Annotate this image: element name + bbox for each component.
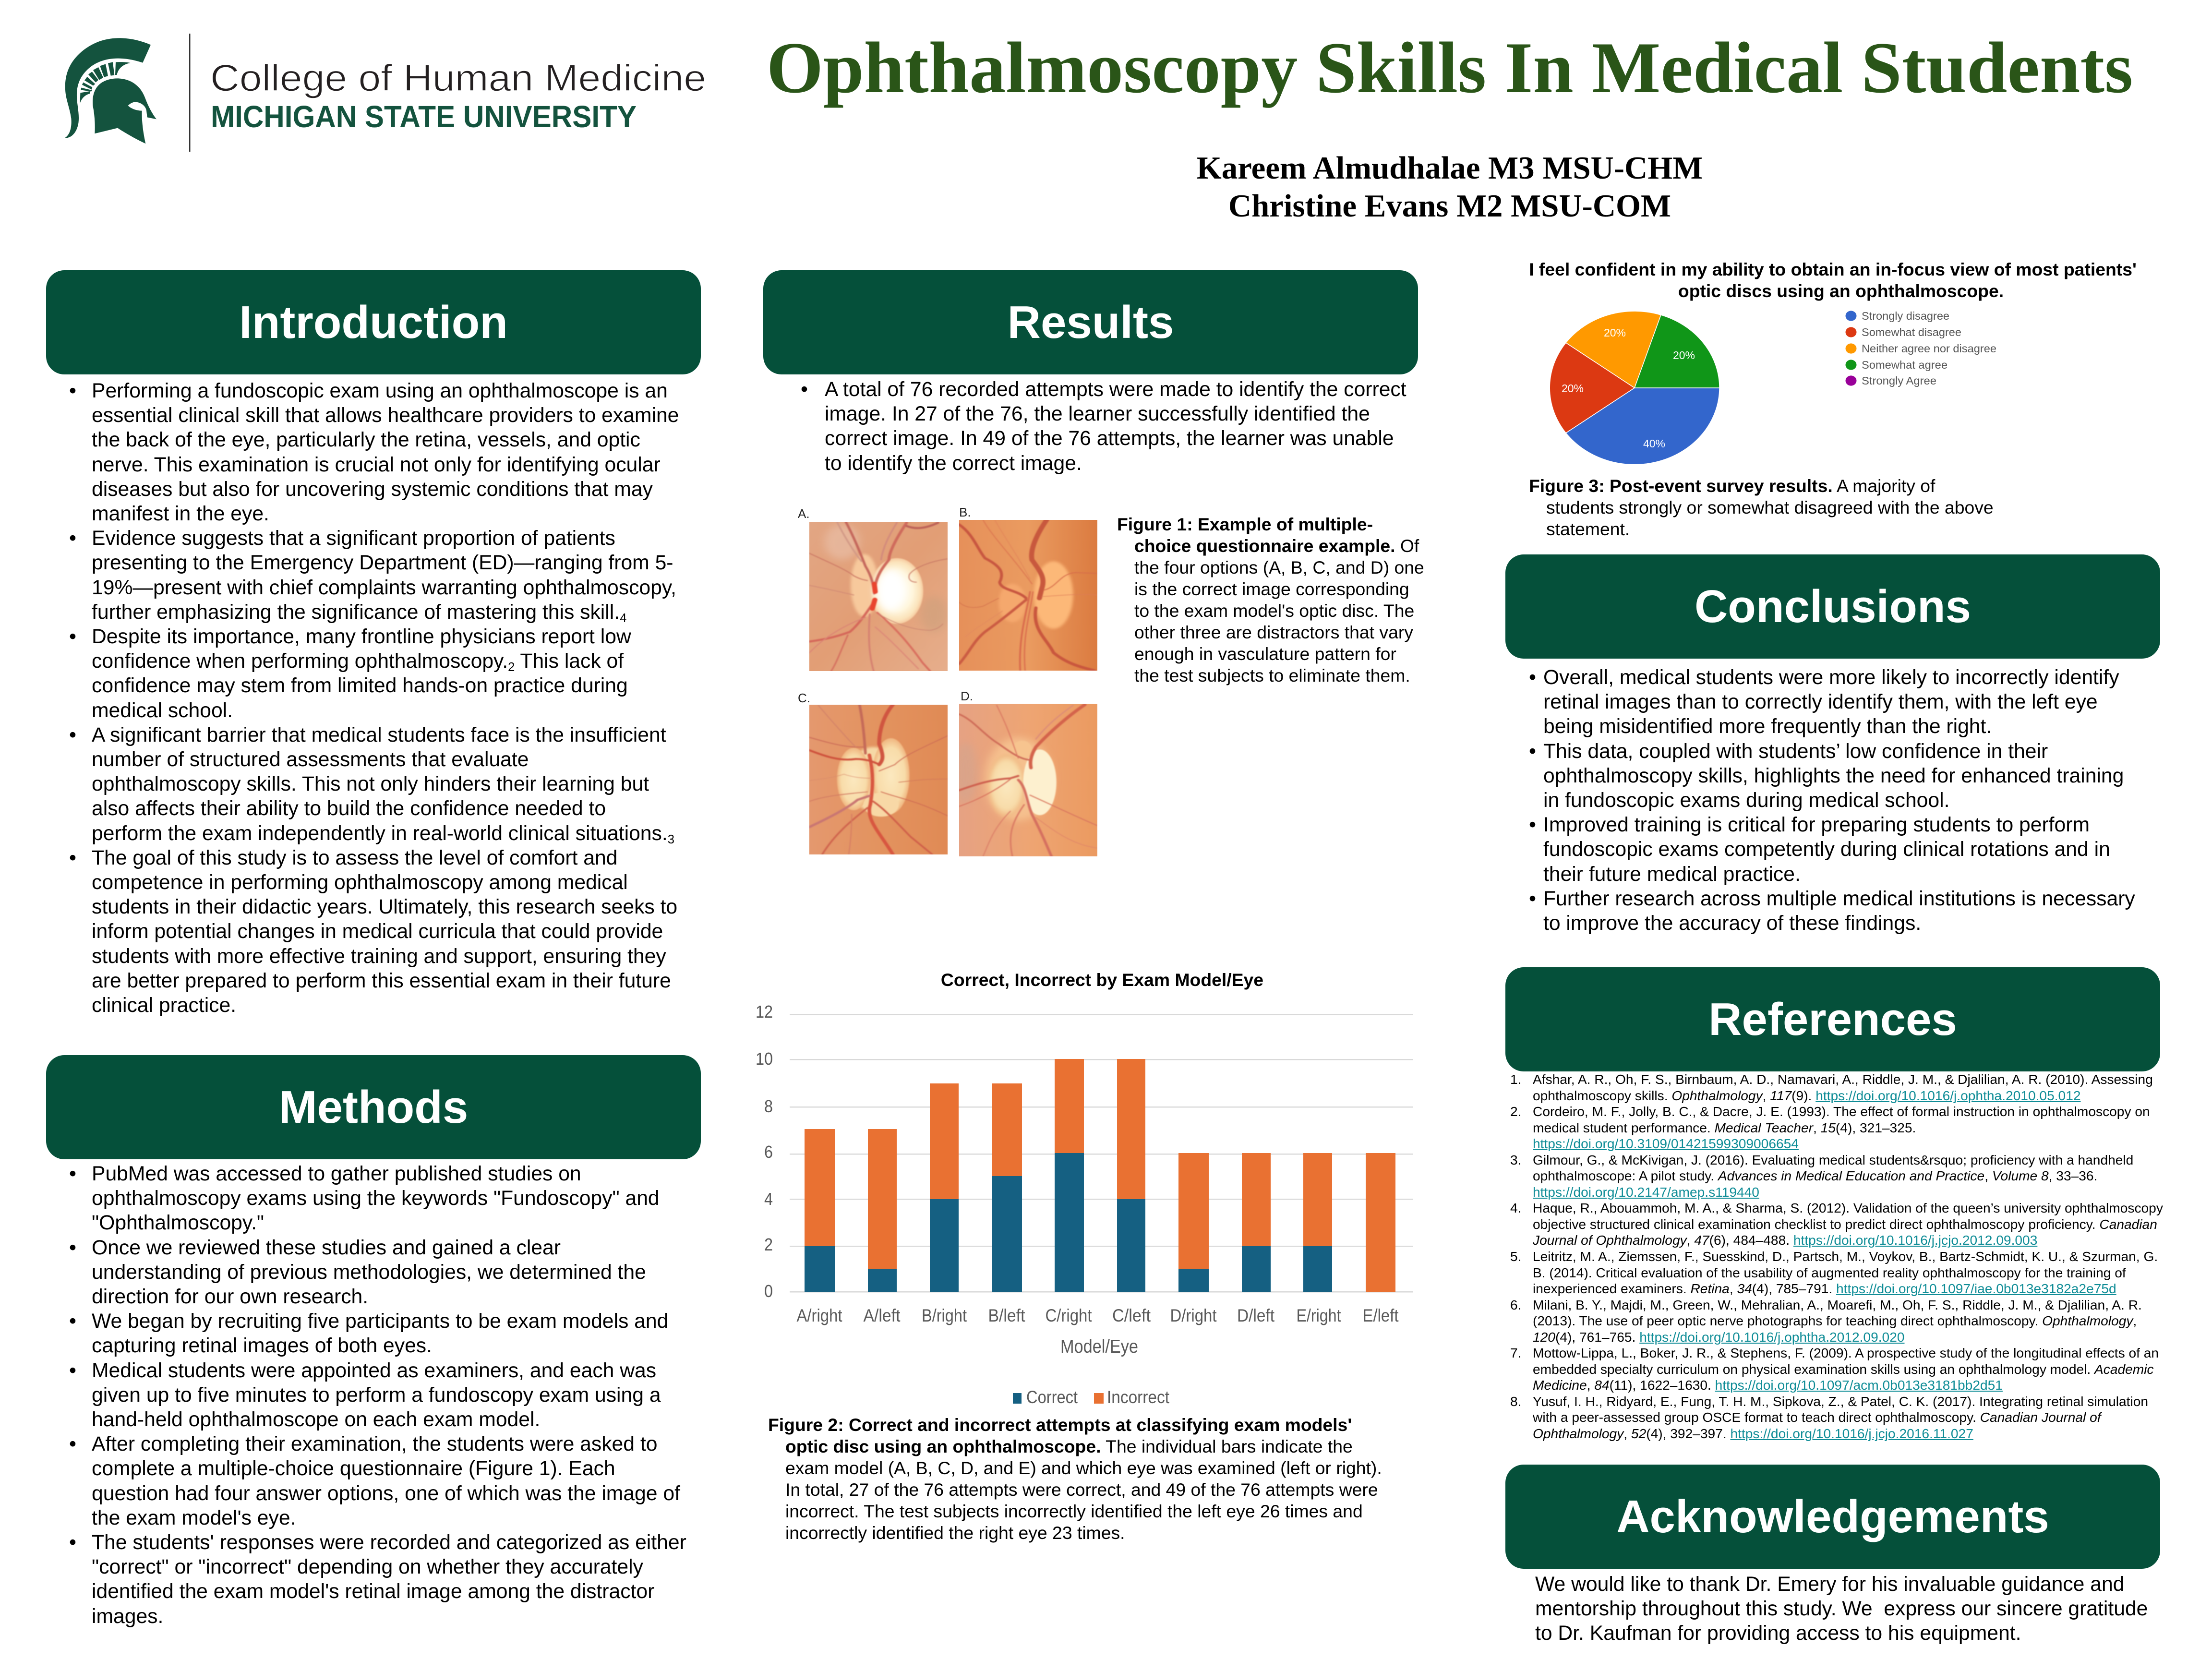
figure 1 caption: the test subjects to eliminate them.	[1134, 665, 1410, 685]
panel: reference list: Afshar, A. R., Oh, F. S., Birnbaum, A. D., Namavari, A., Riddle, J. M., & Djalilian, A. R. (2010). Assessing	[1533, 1072, 2153, 1087]
panel: introduction text: competence in performing ophthalmoscopy among medical	[92, 871, 628, 894]
x axis labels: B/left	[988, 1306, 1025, 1325]
legend: Incorrect	[1107, 1387, 1170, 1407]
image D	[954, 704, 1097, 856]
panel: reference list: Journal of Ophthalmology, 47(6), 484–488. https://doi.org/10.1016/j.jcjo.2012.09.003	[1533, 1233, 2037, 1248]
figure 2 caption	[768, 1415, 1382, 1543]
panel: methods text: "Ophthalmoscopy."	[92, 1211, 264, 1234]
heading: Conclusions: Conclusions	[1695, 581, 1971, 632]
x axis labels: A/left	[863, 1306, 901, 1325]
panel: introduction text: presenting to the Emergency Department (ED)—ranging from 5-	[92, 551, 673, 574]
panel: methods text: "correct" or "incorrect" depending on whether they accurately	[92, 1555, 643, 1578]
legend: Correct	[1026, 1387, 1078, 1407]
panel: reference list: inexperienced examiners. Retina, 34(4), 785–791. https://doi.org/10.1097/iae.0b013e3182a2e75d	[1533, 1281, 2116, 1296]
figure 1 caption: the four options (A, B, C, and D) one	[1134, 557, 1424, 577]
panel: reference list: ophthalmoscopy skills. Ophthalmology, 117(9). https://doi.org/10.1016/j.ophtha.2010.05.012	[1533, 1088, 2081, 1103]
figure 1 caption: to the exam model's optic disc. The	[1134, 601, 1414, 621]
panel: methods text: images.	[92, 1605, 163, 1628]
panel: introduction text: also affects their ability to build the confidence needed to	[92, 797, 606, 820]
y axis labels: 6	[764, 1142, 773, 1162]
y axis labels	[756, 1002, 773, 1301]
pie legend: Somewhat disagree	[1862, 326, 1961, 338]
panel: introduction text: students with more effective training and support, ensuring they	[92, 945, 666, 968]
heading: Results: Results	[1008, 297, 1174, 348]
y axis labels: 2	[764, 1235, 773, 1254]
panel: methods text: hand-held ophthalmoscope on each exam model.	[92, 1408, 540, 1431]
heading: Introduction	[46, 270, 701, 374]
heading: Conclusions	[1505, 554, 2160, 659]
image labels: A.	[798, 506, 810, 521]
panel: reference list: ophthalmoscope: A pilot study. Advances in Medical Education and Practice, Volume 8, 33–36.	[1533, 1168, 2097, 1183]
college name: College of Human Medicine	[210, 57, 706, 99]
text: 7.	[1510, 1346, 1521, 1360]
figure 1 caption: Figure 1: Example of multiple-	[1117, 514, 1373, 534]
panel: introduction text: manifest in the eye.	[92, 502, 269, 525]
panel: results text: A total of 76 recorded attempts were made to identify the correct	[825, 378, 1407, 401]
panel: reference list: with a peer-assessed group OSCE format to teach direct ophthalmoscopy. Canadian Journal of	[1533, 1410, 2101, 1425]
pie legend: Somewhat agree	[1862, 359, 1948, 371]
x axis title: Model/Eye	[1060, 1336, 1138, 1357]
text: 3.	[1510, 1153, 1521, 1167]
panel: introduction text: students in their didactic years. Ultimately, this research seeks to	[92, 895, 677, 918]
panel: reference list	[1533, 1071, 2163, 1442]
y axis labels: 4	[764, 1189, 773, 1209]
pie chart heading	[1529, 259, 2137, 301]
pie labels: 20%	[1562, 382, 1584, 395]
panel: reference list: objective structured clinical examination checklist to predict direct ophthalmoscopy proficiency. Canadian	[1533, 1217, 2157, 1232]
text: 5.	[1510, 1249, 1521, 1264]
image labels: D.	[961, 689, 973, 703]
panel: methods text: identified the exam model's retinal image among the distractor	[92, 1580, 654, 1603]
panel: reference list: B. (2014). Critical evaluation of the usability of augmented reality ophthalmoscopy for the training of	[1533, 1265, 2126, 1280]
icon: spartan helmet	[65, 38, 156, 144]
panel: introduction text: perform the exam independently in real-world clinical situations.3	[92, 822, 674, 846]
title: Ophthalmoscopy Skills In Medical Students	[767, 27, 2133, 108]
pie legend: Neither agree nor disagree	[1862, 342, 1996, 355]
university name: MICHIGAN STATE UNIVERSITY	[211, 99, 637, 134]
pie chart: survey results	[1550, 310, 1996, 464]
panel: reference list: (2013). The use of peer optic nerve photographs for teaching direct ophthalmoscopy. Ophthalmology,	[1533, 1313, 2137, 1328]
panel: conclusions text: fundoscopic exams competently during clinical rotations and in	[1543, 838, 2110, 861]
panel: methods text: We began by recruiting five participants to be exam models and	[92, 1310, 668, 1333]
panel: acknowledgements text: to Dr. Kaufman for providing access to his equipment.	[1535, 1622, 2021, 1645]
x axis labels: B/right	[922, 1306, 967, 1325]
panel: introduction text: Despite its importance, many frontline physicians report low	[92, 625, 631, 648]
panel: reference list: Gilmour, G., & McKivigan, J. (2016). Evaluating medical students&rsquo; proficiency with a handheld	[1533, 1153, 2133, 1167]
authors: Kareem Almudhalae M3 MSU-CHM	[1197, 150, 1703, 186]
panel: reference list: Medicine, 84(11), 1622–1630. https://doi.org/10.1097/acm.0b013e3181bb2d51	[1533, 1378, 2003, 1393]
pie labels: 40%	[1643, 437, 1665, 450]
panel: methods text	[70, 1162, 686, 1628]
x axis labels: E/right	[1296, 1306, 1341, 1325]
figure 2 caption: optic disc using an ophthalmoscope. The individual bars indicate the	[785, 1436, 1353, 1456]
panel: methods text: PubMed was accessed to gather published studies on	[92, 1162, 581, 1185]
panel: introduction text: diseases but also for uncovering systemic conditions that may	[92, 478, 653, 501]
panel: reference list: 120(4), 761–765. https://doi.org/10.1016/j.ophtha.2012.09.020	[1533, 1330, 1905, 1345]
pie legend: Strongly disagree	[1862, 310, 1949, 322]
panel: acknowledgements text: We would like to thank Dr. Emery for his invaluable guidance and	[1535, 1573, 2124, 1596]
x axis labels: D/left	[1237, 1306, 1275, 1325]
panel: methods text: understanding of previous methodologies, we determined the	[92, 1261, 646, 1284]
pie chart heading: optic discs using an ophthalmoscope.	[1678, 281, 2004, 301]
heading: References	[1505, 967, 2160, 1071]
panel: acknowledgements text	[1535, 1572, 2148, 1646]
panel: reference list: Leitritz, M. A., Ziemssen, F., Suesskind, D., Partsch, M., Voykov, B., Bartz-Schmidt, K. U., & Szurman, G.	[1533, 1249, 2158, 1264]
y axis labels: 10	[756, 1049, 773, 1069]
panel: reference list: Cordeiro, M. F., Jolly, B. C., & Dacre, J. E. (1993). The effect of formal instruction in ophthalmoscopy on	[1533, 1104, 2150, 1119]
pie labels: 20%	[1673, 349, 1695, 361]
panel: introduction text: clinical practice.	[92, 994, 236, 1017]
figure 2 caption: exam model (A, B, C, D, and E) and which eye was examined (left or right).	[785, 1458, 1382, 1478]
panel: introduction text: essential clinical skill that allows healthcare providers to examine	[92, 404, 679, 427]
panel: introduction text: medical school.	[92, 699, 233, 722]
figure 1 caption: choice questionnaire example. Of	[1134, 536, 1419, 556]
panel: results text: correct image. In 49 of the 76 attempts, the learner was unable	[825, 427, 1394, 450]
panel: methods text: ophthalmoscopy exams using the keywords "Fundoscopy" and	[92, 1187, 660, 1210]
figure 3 caption	[1529, 476, 1994, 539]
pie legend	[1845, 310, 1996, 387]
panel: reference list: embedded specialty curriculum on physical examination skills using an ophthalmology model. Academic	[1533, 1362, 2154, 1377]
authors: Christine Evans M2 MSU-COM	[1228, 188, 1671, 224]
heading: Introduction: Introduction	[239, 297, 508, 348]
panel: reference list: https://doi.org/10.3109/01421599309006654	[1533, 1136, 1799, 1151]
heading: Acknowledgements: Acknowledgements	[1616, 1491, 2049, 1542]
panel: introduction text: Performing a fundoscopic exam using an ophthalmoscope is an	[92, 379, 668, 402]
image B	[959, 520, 1097, 671]
panel: introduction text: further emphasizing the significance of mastering this skill.4	[92, 601, 626, 625]
text: 2.	[1510, 1104, 1521, 1119]
figure 2 caption: Figure 2: Correct and incorrect attempts at classifying exam models'	[768, 1415, 1352, 1435]
figure 2 caption: incorrect. The test subjects incorrectly identified the left eye 26 times and	[785, 1501, 1363, 1521]
authors	[1197, 150, 1703, 224]
text: 4.	[1510, 1201, 1521, 1215]
panel: introduction text: nerve. This examination is crucial not only for identifying ocular	[92, 453, 661, 476]
panel: introduction text: A significant barrier that medical students face is the insufficient	[92, 723, 666, 746]
panel: reference list: https://doi.org/10.2147/amep.s119440	[1533, 1185, 1759, 1200]
figure 1 caption: is the correct image corresponding	[1134, 579, 1409, 599]
heading: References: References	[1708, 994, 1957, 1045]
incorrect bars	[805, 1059, 1395, 1292]
image A	[809, 522, 948, 671]
bar chart: correct vs incorrect by exam model and eye	[756, 970, 1413, 1407]
image labels: C.	[798, 691, 810, 705]
panel: methods text: Once we reviewed these studies and gained a clear	[92, 1236, 561, 1259]
heading: Acknowledgements	[1505, 1465, 2160, 1569]
panel: methods text: After completing their examination, the students were asked to	[92, 1432, 657, 1455]
figure 2 caption: In total, 27 of the 76 attempts were correct, and 49 of the 76 attempts were	[785, 1479, 1378, 1500]
pie labels: 20%	[1604, 326, 1626, 339]
figure 3 caption: students strongly or somewhat disagreed with the above	[1546, 497, 1994, 517]
panel: results text: image. In 27 of the 76, the learner successfully identified the	[825, 402, 1370, 425]
x axis labels: D/right	[1170, 1306, 1217, 1325]
text: 8.	[1510, 1394, 1521, 1409]
panel: methods text: capturing retinal images of both eyes.	[92, 1334, 432, 1357]
text: 1.	[1510, 1072, 1521, 1087]
panel: conclusions text: Further research across multiple medical institutions is necessary	[1543, 887, 2135, 910]
text: 6.	[1510, 1298, 1521, 1312]
panel: introduction text: 19%—present with chief complaints warranting ophthalmoscopy,	[92, 576, 676, 599]
figure 3 caption: statement.	[1546, 519, 1630, 539]
figure 1 caption	[1117, 514, 1424, 685]
panel: methods text: The students' responses were recorded and categorized as either	[92, 1531, 686, 1554]
x axis labels: E/left	[1362, 1306, 1399, 1325]
panel: methods text: Medical students were appointed as examiners, and each was	[92, 1359, 656, 1382]
y axis labels: 12	[756, 1002, 773, 1022]
figure 2 caption: incorrectly identified the right eye 23 times.	[785, 1523, 1125, 1543]
panel: methods text: the exam model's eye.	[92, 1506, 296, 1529]
panel: introduction text: Evidence suggests that a significant proportion of patients	[92, 527, 615, 550]
logo: MSU College of Human Medicine	[65, 34, 706, 152]
pie chart heading: I feel confident in my ability to obtain an in-focus view of most patients'	[1529, 259, 2137, 279]
image labels	[798, 505, 973, 705]
legend	[1013, 1387, 1170, 1407]
panel: results text	[802, 378, 1407, 475]
panel: conclusions text: their future medical practice.	[1543, 863, 1801, 886]
panel: conclusions text: Improved training is critical for preparing students to perform	[1543, 813, 2090, 836]
y axis labels: 0	[764, 1281, 773, 1301]
panel: reference list: Haque, R., Abouammoh, M. A., & Sharma, S. (2012). Validation of the queen’s university ophthalmoscopy	[1533, 1201, 2163, 1215]
figure 1: retinal images	[798, 505, 1097, 856]
panel: conclusions text: being misidentified more frequently than the right.	[1543, 715, 1992, 738]
panel: methods text: complete a multiple-choice questionnaire (Figure 1). Each	[92, 1457, 615, 1480]
panel: introduction text: the back of the eye, particularly the retina, vessels, and optic	[92, 428, 640, 451]
panel: conclusions text: This data, coupled with students’ low confidence in their	[1543, 740, 2048, 763]
panel: conclusions text	[1529, 666, 2135, 935]
panel: introduction text: The goal of this study is to assess the level of comfort and	[92, 846, 617, 869]
y axis labels: 8	[764, 1096, 773, 1116]
panel: conclusions text: in fundoscopic exams during medical school.	[1543, 789, 1949, 812]
x axis labels: A/right	[797, 1306, 842, 1325]
panel: reference list: medical student performance. Medical Teacher, 15(4), 321–325.	[1533, 1120, 1916, 1135]
panel: introduction text: confidence may stem from limited hands-on practice during	[92, 674, 628, 697]
pie legend: Strongly Agree	[1862, 374, 1936, 387]
x axis labels	[797, 1306, 1399, 1357]
panel: methods text: given up to five minutes to perform a fundoscopy exam using a	[92, 1383, 661, 1407]
panel: reference list: Ophthalmology, 52(4), 392–397. https://doi.org/10.1016/j.jcjo.2016.11.027	[1533, 1426, 1973, 1441]
figure 1 caption: enough in vasculature pattern for	[1134, 644, 1396, 664]
image labels: B.	[959, 505, 971, 519]
x axis labels: C/left	[1112, 1306, 1151, 1325]
panel: acknowledgements text: mentorship throughout this study. We express our sincere gratitude	[1535, 1597, 2148, 1620]
image C	[809, 705, 948, 854]
panel: introduction text: number of structured assessments that evaluate	[92, 748, 529, 771]
correct bars	[805, 1153, 1332, 1292]
chart title: Correct, Incorrect by Exam Model/Eye	[941, 970, 1263, 990]
panel: introduction text: inform potential changes in medical curricula that could provide	[92, 920, 663, 943]
figure 3 caption: Figure 3: Post-event survey results. A majority of	[1529, 476, 1935, 496]
panel: reference list: Milani, B. Y., Majdi, M., Green, W., Mehralian, A., Moarefi, M., Oh, F. S., Riddle, J. M., & Djalilian, A. R.	[1533, 1298, 2142, 1312]
panel: conclusions text: Overall, medical students were more likely to incorrectly identify	[1543, 666, 2119, 689]
panel: conclusions text: to improve the accuracy of these findings.	[1543, 912, 1921, 935]
pie labels	[1562, 326, 1695, 450]
panel: methods text: direction for our own research.	[92, 1285, 368, 1308]
panel: reference list: Yusuf, I. H., Ridyard, E., Fung, T. H. M., Sipkova, Z., & Patel, C. K. (2017). Integrating retinal simulation	[1533, 1394, 2148, 1409]
x axis labels: C/right	[1046, 1306, 1092, 1325]
panel: introduction text: confidence when performing ophthalmoscopy.2 This lack of	[92, 649, 624, 674]
panel: methods text: question had four answer options, one of which was the image of	[92, 1482, 680, 1505]
divider line	[189, 34, 190, 152]
panel: reference list: Mottow-Lippa, L., Boker, J. R., & Stephens, F. (2009). A prospective study of the longitudinal effects of an	[1533, 1346, 2159, 1360]
figure 1 caption: other three are distractors that vary	[1134, 622, 1413, 642]
panel: conclusions text: retinal images than to correctly identify them, with the left eye	[1543, 690, 2098, 713]
panel: results text: to identify the correct image.	[825, 452, 1082, 475]
heading: Results	[763, 270, 1418, 374]
panel: conclusions text: ophthalmoscopy skills, highlights the need for enhanced training	[1543, 764, 2124, 787]
panel: introduction text	[70, 379, 679, 1017]
heading: Methods	[46, 1055, 701, 1159]
panel: introduction text: ophthalmoscopy skills. This not only hinders their learning but	[92, 772, 649, 795]
heading: Methods: Methods	[279, 1081, 468, 1133]
panel: introduction text: are better prepared to perform this essential exam in their future	[92, 969, 671, 992]
